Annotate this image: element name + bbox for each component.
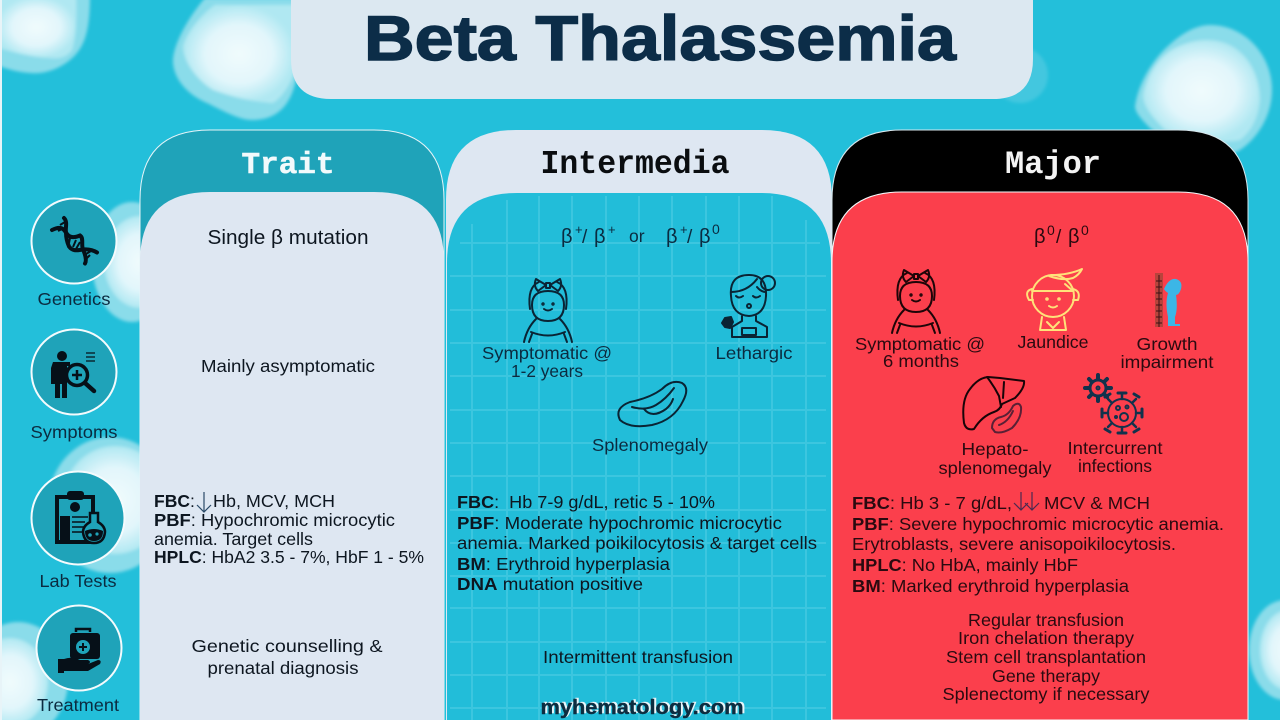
icon: symptoms <box>32 330 116 414</box>
treatment text: Stem cell transplantation <box>946 647 1146 667</box>
labels <box>855 332 1214 478</box>
heading: trait: Trait <box>242 148 334 183</box>
heading: major: Major <box>1005 146 1101 183</box>
icon: liver and spleen <box>963 377 1024 432</box>
labels: Growth <box>1136 334 1198 354</box>
labels: Intercurrent <box>1068 438 1163 458</box>
lab results: HPLC: No HbA, mainly HbF <box>852 555 1078 575</box>
labels <box>482 343 793 455</box>
labels: infections <box>1078 456 1152 476</box>
treatment text: prenatal diagnosis <box>208 658 359 678</box>
symptoms text: Mainly asymptomatic <box>201 356 375 376</box>
genotype text: 0 <box>712 221 720 237</box>
labels: 6 months <box>883 351 959 371</box>
lab results: FBC: Hb 7-9 g/dL, retic 5 - 10% <box>457 492 715 512</box>
icon: genetics <box>32 198 116 284</box>
lab results <box>457 492 817 594</box>
genotype text: + <box>608 222 616 237</box>
genotype text: / <box>582 227 588 248</box>
treatment text <box>942 610 1150 704</box>
icon: lab tests <box>32 472 124 564</box>
title banner <box>291 0 1033 99</box>
labels: 1-2 years <box>511 361 583 381</box>
icon: lethargic person <box>722 275 775 337</box>
genotype text: β <box>699 226 711 248</box>
genotype text: 0 <box>1047 222 1055 238</box>
labels: Splenomegaly <box>592 435 708 455</box>
lab results: PBF: Severe hypochromic microcytic anemia. <box>852 514 1224 534</box>
lab results: BM: Erythroid hyperplasia <box>457 554 670 574</box>
lab results <box>852 492 1224 596</box>
panel: intermedia <box>446 130 832 720</box>
genotype text: or <box>629 226 645 246</box>
genotype text: β <box>1068 226 1080 248</box>
label: symptoms: Symptoms <box>30 422 118 442</box>
icon: jaundice child <box>1027 269 1082 330</box>
watermark: myhematology.com <box>540 697 744 719</box>
icon: treatment <box>36 606 122 690</box>
genetics text: Single β mutation <box>208 227 368 249</box>
labels: Jaundice <box>1018 332 1088 352</box>
genotype text <box>561 221 720 248</box>
treatment text: Intermittent transfusion <box>543 647 733 667</box>
lab results: anemia. Target cells <box>154 529 313 549</box>
treatment text: Gene therapy <box>992 666 1100 686</box>
label: genetics: Genetics <box>38 289 111 309</box>
genotype text: + <box>680 222 688 237</box>
labels: Symptomatic @ <box>855 334 985 354</box>
treatment text: Splenectomy if necessary <box>942 684 1150 704</box>
lab results: PBF: Moderate hypochromic microcytic <box>457 513 782 533</box>
icon: growth impairment <box>1155 273 1181 327</box>
lab results <box>154 491 424 567</box>
labels: Lethargic <box>716 343 793 363</box>
icon: virus <box>1085 375 1142 433</box>
heading: intermedia: Intermedia <box>540 146 730 183</box>
icon: baby <box>892 270 940 333</box>
lab results: Hb, MCV, MCH <box>213 491 335 511</box>
lab results: Erytroblasts, severe anisopoikilocytosis. <box>852 534 1176 554</box>
lab results: DNA mutation positive <box>457 574 643 594</box>
label: treatment: Treatment <box>37 695 119 715</box>
genotype text: / <box>687 227 693 248</box>
lab results: anemia. Marked poikilocytosis & target cells <box>457 533 817 553</box>
label: lab tests: Lab Tests <box>40 571 117 591</box>
lab results: FBC: Hb 3 - 7 g/dL, <box>852 493 1012 513</box>
genotype text: 0 <box>1081 222 1089 238</box>
treatment text <box>192 636 383 678</box>
lab results: PBF: Hypochromic microcytic <box>154 510 395 530</box>
labels: splenomegaly <box>938 458 1052 478</box>
lab results: BM: Marked erythroid hyperplasia <box>852 576 1129 596</box>
genotype text: + <box>575 222 583 237</box>
genotype text: β <box>666 226 678 248</box>
genotype text <box>1034 222 1089 248</box>
title: Beta Thalassemia <box>364 4 957 74</box>
labels: Symptomatic @ <box>482 343 612 363</box>
lab results: HPLC: HbA2 3.5 - 7%, HbF 1 - 5% <box>154 547 424 567</box>
lab results: MCV & MCH <box>1044 493 1150 513</box>
lab results: FBC: <box>154 491 195 511</box>
treatment text: Iron chelation therapy <box>958 628 1134 648</box>
genotype text: β <box>594 226 606 248</box>
panel: trait <box>140 130 444 720</box>
treatment text: Genetic counselling & <box>192 636 383 656</box>
panel: major <box>832 130 1248 720</box>
labels: Hepato- <box>962 439 1029 459</box>
genotype text: β <box>1034 226 1046 248</box>
treatment text: Regular transfusion <box>968 610 1124 630</box>
genotype text: / <box>1056 227 1062 248</box>
icon: baby <box>524 279 572 342</box>
genotype text: β <box>561 226 573 248</box>
labels: impairment <box>1120 352 1214 372</box>
icon: spleen <box>618 382 686 426</box>
